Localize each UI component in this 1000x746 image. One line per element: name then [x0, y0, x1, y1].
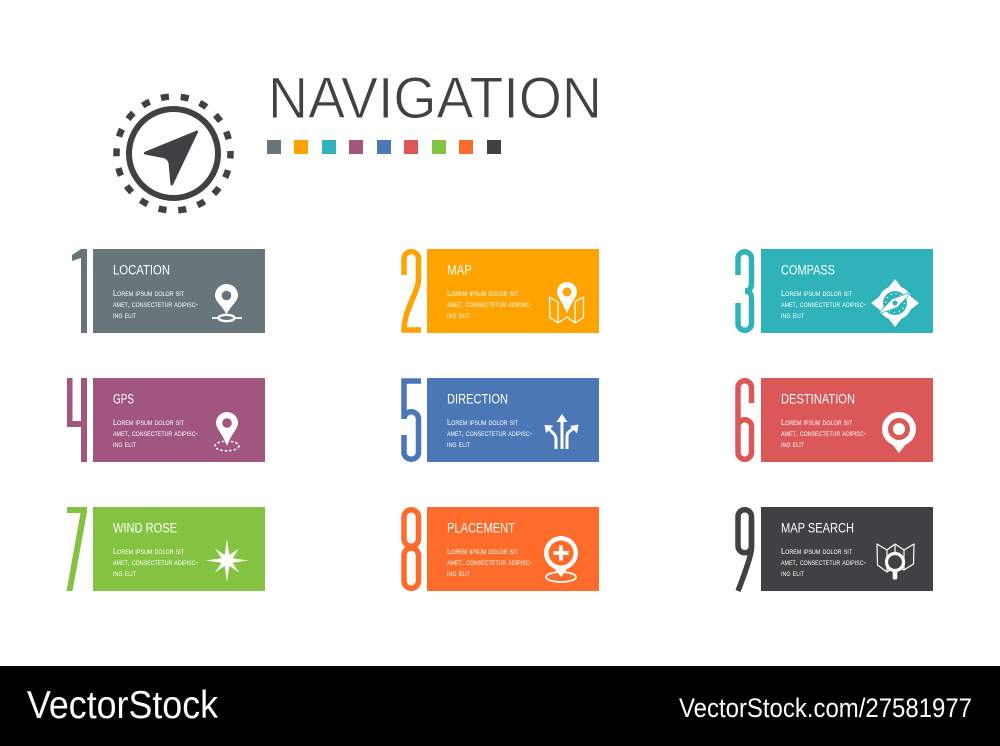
heading: destination: DESTINATION — [781, 392, 855, 406]
body text — [781, 417, 866, 449]
body text: Lorem ipsum dolor sit — [447, 546, 518, 556]
body text: Lorem ipsum dolor sit — [113, 546, 184, 556]
heading: location: LOCATION — [113, 262, 170, 278]
body text — [781, 288, 866, 320]
body text: ing elit — [447, 439, 470, 449]
icon: map search — [877, 544, 914, 580]
number 7 — [66, 507, 87, 591]
panel: 2 map — [404, 249, 599, 333]
body text: Lorem ipsum dolor sit — [113, 417, 184, 427]
icon: direction arrows — [544, 414, 578, 449]
number 3 — [738, 252, 752, 330]
body text: Lorem ipsum dolor sit — [447, 288, 518, 298]
panel: 5 direction — [404, 378, 599, 462]
brand name: VectorStock — [27, 684, 218, 727]
heading: wind rose: WIND ROSE — [113, 520, 177, 536]
body text: ing elit — [113, 310, 136, 320]
panel: 9 map search — [738, 507, 933, 591]
body text: amet, consectetur adipisc- — [781, 557, 866, 567]
panel: 6 destination — [738, 378, 933, 462]
panel: 3 compass — [738, 249, 933, 333]
heading: compass: COMPASS — [781, 262, 835, 278]
number 4 — [67, 378, 87, 462]
icon: location pin — [212, 284, 242, 321]
body text: ing elit — [447, 310, 470, 320]
icon: placement marker — [544, 536, 578, 582]
number 1 — [72, 249, 87, 333]
body text: ing elit — [113, 568, 136, 578]
icon: destination marker — [882, 412, 916, 453]
number 2 — [404, 252, 421, 330]
icon: wind rose — [206, 538, 248, 582]
heading: direction: DIRECTION — [447, 392, 508, 406]
body text: amet, consectetur adipisc- — [113, 428, 198, 438]
body text: amet, consectetur adipisc- — [781, 299, 866, 309]
body text: Lorem ipsum dolor sit — [781, 417, 852, 427]
body text: amet, consectetur adipisc- — [781, 428, 866, 438]
panel: 1 location — [72, 249, 265, 333]
body text: ing elit — [781, 439, 804, 449]
body text — [447, 288, 532, 320]
stock url: VectorStock.com/27581977 — [679, 693, 972, 723]
number 6 — [738, 381, 752, 459]
heading: map: MAP — [447, 262, 472, 278]
heading: placement: PLACEMENT — [447, 520, 515, 536]
icon: gps pin — [215, 412, 239, 451]
heading: gps: GPS — [113, 392, 134, 406]
body text: Lorem ipsum dolor sit — [781, 288, 852, 298]
body text — [447, 546, 532, 578]
heading: map search: MAP SEARCH — [781, 520, 854, 536]
panel: 8 placement — [404, 507, 599, 591]
icon: navigation compass arrow — [116, 96, 230, 210]
body text: Lorem ipsum dolor sit — [113, 288, 184, 298]
body text: ing elit — [113, 439, 136, 449]
body text: amet, consectetur adipisc- — [447, 557, 532, 567]
number 9 — [738, 510, 752, 591]
colour swatches — [267, 140, 501, 154]
body text: Lorem ipsum dolor sit — [781, 546, 852, 556]
title: NAVIGATION — [268, 66, 602, 131]
body text — [447, 417, 532, 449]
number 8 — [404, 510, 418, 588]
body text: amet, consectetur adipisc- — [447, 428, 532, 438]
panel: 4 gps — [67, 378, 265, 462]
body text — [781, 546, 866, 578]
body text: amet, consectetur adipisc- — [447, 299, 532, 309]
icon: map with pin — [550, 282, 584, 323]
body text — [113, 546, 198, 578]
body text: ing elit — [447, 568, 470, 578]
body text: Lorem ipsum dolor sit — [447, 417, 518, 427]
panel: 7 wind rose — [66, 507, 265, 591]
footer bar — [0, 666, 1000, 746]
icon: compass — [871, 279, 919, 327]
body text: ing elit — [781, 568, 804, 578]
body text: amet, consectetur adipisc- — [113, 299, 198, 309]
body text — [113, 288, 198, 320]
body text: amet, consectetur adipisc- — [113, 557, 198, 567]
number 5 — [404, 381, 421, 459]
body text — [113, 417, 198, 449]
body text: ing elit — [781, 310, 804, 320]
